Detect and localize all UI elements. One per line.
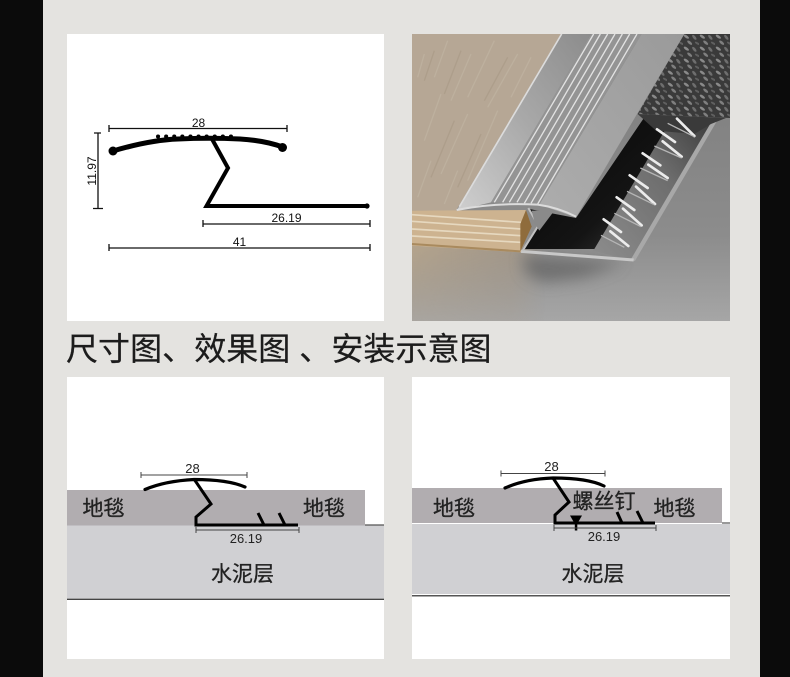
wood floor surface	[412, 34, 561, 211]
gripper spikes	[604, 119, 694, 246]
label: carpet right: 地毯	[303, 498, 345, 520]
base front edge	[521, 251, 634, 260]
dimension 41	[109, 235, 370, 251]
ribbed tread	[491, 34, 642, 204]
dimension 41: 41	[233, 235, 246, 249]
dimension 28: 28	[185, 461, 200, 476]
flat tread	[539, 34, 684, 217]
end profile edge	[457, 204, 576, 251]
dimension 26.19	[196, 527, 299, 546]
icon: screw	[570, 516, 582, 530]
title: 尺寸图、效果图 、安装示意图	[66, 331, 492, 367]
black channel	[523, 117, 668, 249]
label: concrete: 水泥层	[562, 563, 624, 586]
dimension 28	[501, 459, 605, 476]
dimension 26.19: 26.19	[230, 531, 262, 546]
profile section	[505, 478, 655, 523]
profile section	[145, 479, 298, 525]
label: concrete: 水泥层	[211, 563, 274, 586]
dimension 11.97	[85, 133, 103, 208]
dimension 28: 28	[192, 116, 205, 130]
panel: installation diagram without screw	[67, 377, 384, 659]
floor shadow	[523, 256, 624, 282]
panel: dimension drawing	[67, 34, 384, 321]
label: screw: 螺丝钉	[572, 490, 636, 514]
dimension 26.19: 26.19	[271, 211, 302, 225]
carpet shadow	[638, 114, 726, 134]
dimension 26.19	[554, 525, 656, 544]
concrete layer	[67, 526, 384, 598]
dimension 28	[109, 116, 287, 132]
concrete layer	[412, 524, 730, 594]
carpet	[638, 34, 730, 118]
carpet layer	[67, 490, 365, 526]
panel: rendered product photo	[412, 34, 730, 321]
panel: installation diagram with screw	[412, 377, 730, 659]
gripper area and base flange	[593, 119, 716, 261]
dimension 28	[141, 461, 247, 478]
label: carpet left: 地毯	[433, 498, 475, 520]
wood floor edge plywood	[412, 210, 532, 252]
carpet layer	[412, 488, 722, 523]
dimension 26.19: 26.19	[588, 529, 620, 544]
label: carpet right: 地毯	[654, 498, 696, 520]
label: carpet left: 地毯	[82, 498, 124, 520]
spike bases	[601, 123, 694, 247]
dimension 11.97: 11.97	[85, 156, 99, 186]
profile cross-section drawing	[108, 136, 370, 209]
dimension 28: 28	[544, 459, 559, 474]
rim: curved lip of the trim	[457, 34, 591, 211]
dimension 26.19	[203, 211, 370, 227]
